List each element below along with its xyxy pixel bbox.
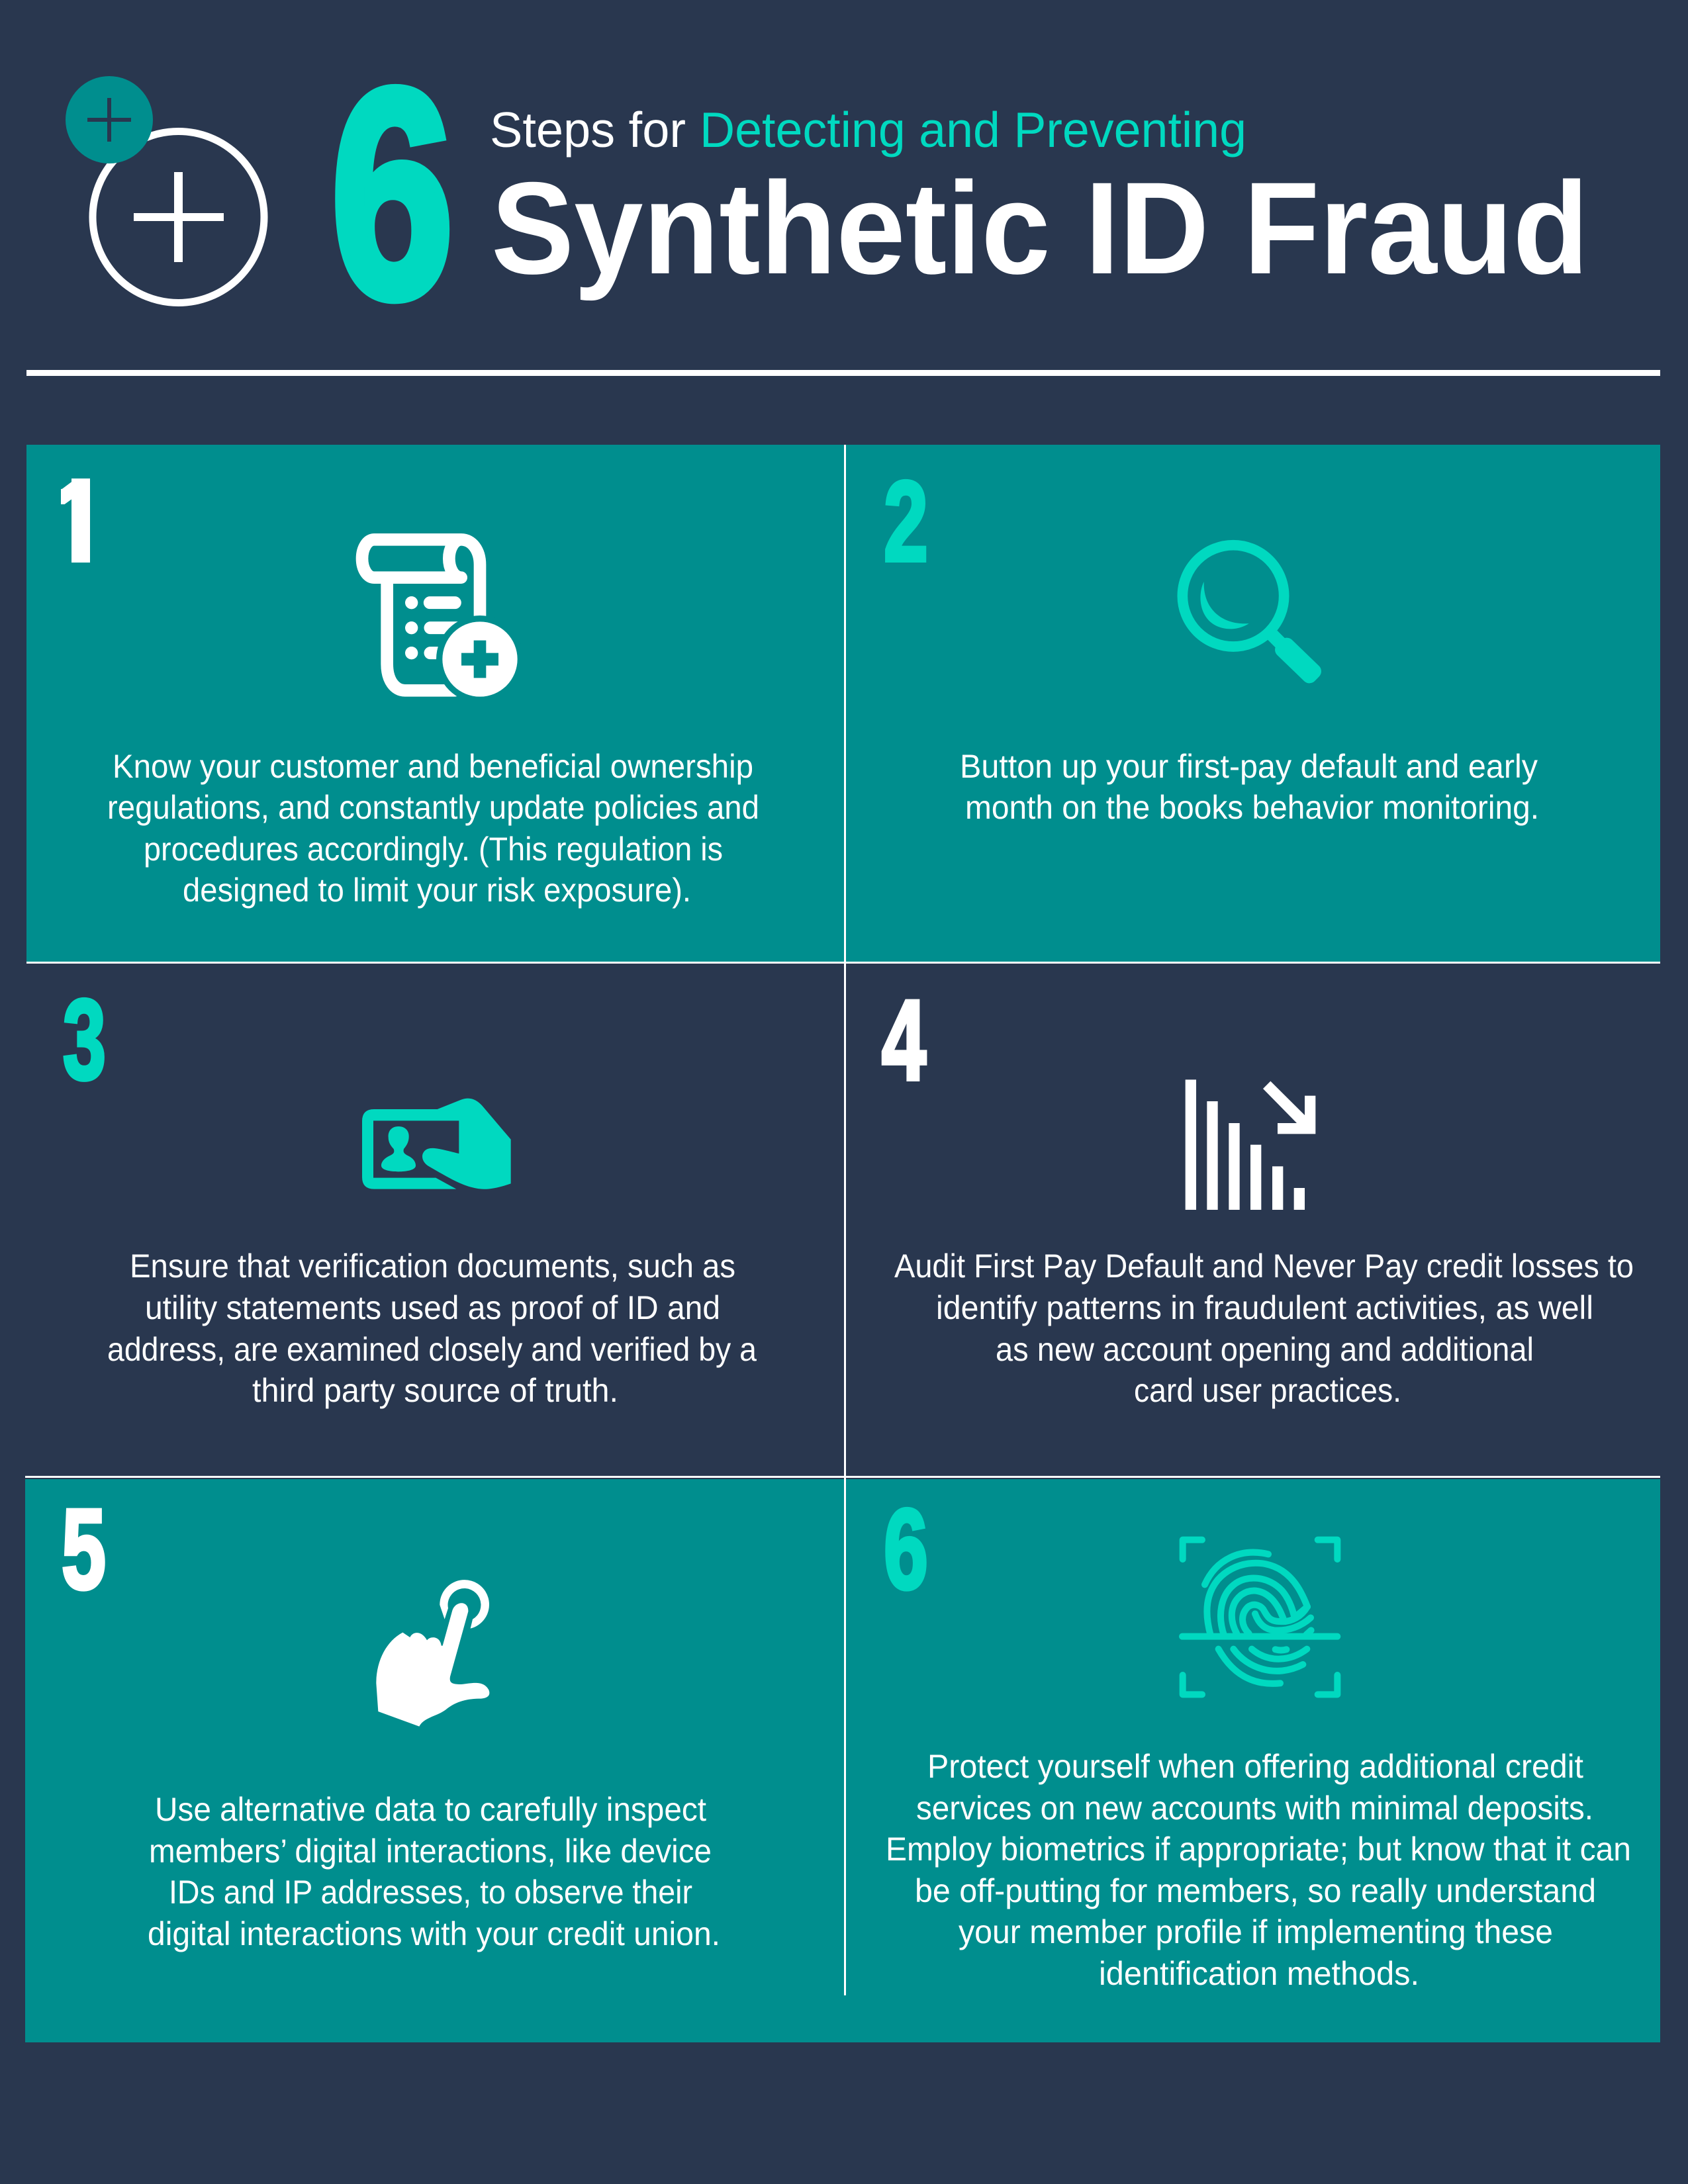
subtitle: Steps for [490,102,686,158]
icon: plus circles [66,76,264,303]
text 3: utility statements used as proof of ID and [145,1289,720,1326]
number 3: 3 [63,977,106,1103]
number 4: 4 [882,978,926,1104]
text 4: as new account opening and additional [996,1331,1534,1368]
text 6: your member profile if implementing these [959,1913,1553,1950]
text 6: Employ biometrics if appropriate; but know that it can [886,1831,1631,1868]
panel 4 [882,978,1634,1409]
icon: finger tapping [376,1580,489,1727]
text 1: regulations, and constantly update policies and [107,789,759,826]
text 4: identify patterns in fraudulent activities, as well [936,1289,1593,1326]
text 3: address, are examined closely and verified by a [107,1331,757,1368]
number 6: 6 [884,1486,928,1613]
number 5: 5 [62,1486,106,1613]
icon: declining bars with arrow [1186,1079,1315,1210]
text 6: be off-putting for members, so really understand [915,1872,1596,1909]
text 3: Ensure that verification documents, such as [130,1248,735,1285]
panel 1 [26,445,845,962]
icon: document with plus [362,539,524,703]
text 6 [886,1748,1631,1992]
text 2: month on the books behavior monitoring. [965,789,1539,826]
text 1: procedures accordingly. (This regulation is [144,831,723,868]
text 5: members’ digital interactions, like device [149,1833,712,1870]
panel 3 [63,977,757,1409]
subtitle: Detecting and Preventing [700,102,1246,158]
icon: hand holding ID card [362,1099,511,1189]
number 1: 1 [50,459,106,585]
text 3 [107,1248,757,1409]
panel 2 [845,445,1660,962]
text 2 [960,748,1539,826]
text 3: third party source of truth. [252,1372,618,1409]
header [66,28,1589,359]
text 5: Use alternative data to carefully inspect [155,1791,706,1828]
text 6: services on new accounts with minimal deposits. [916,1790,1593,1827]
number 2: 2 [884,459,928,585]
text 6: identification methods. [1099,1955,1419,1992]
panel 5 [25,1479,845,2042]
text 5: IDs and IP addresses, to observe their [169,1874,692,1911]
text 2: Button up your first-pay default and early [960,748,1538,785]
text 5: digital interactions with your credit union. [148,1915,720,1952]
text 4: card user practices. [1134,1372,1401,1409]
number 1 [61,478,90,563]
title: Synthetic ID Fraud [491,155,1589,301]
big number 6: 6 [331,28,453,359]
text 1 [107,748,759,909]
text 5 [148,1791,720,1952]
icon: magnifying glass [1182,545,1325,686]
text 1: Know your customer and beneficial ownership [113,748,753,785]
panel 6 [845,1479,1660,2042]
text 1: designed to limit your risk exposure). [183,872,691,909]
text 4 [894,1248,1634,1409]
icon: fingerprint scan [1182,1540,1337,1694]
text 4: Audit First Pay Default and Never Pay credit losses to [894,1248,1634,1285]
text 6: Protect yourself when offering additional credit [927,1748,1583,1785]
